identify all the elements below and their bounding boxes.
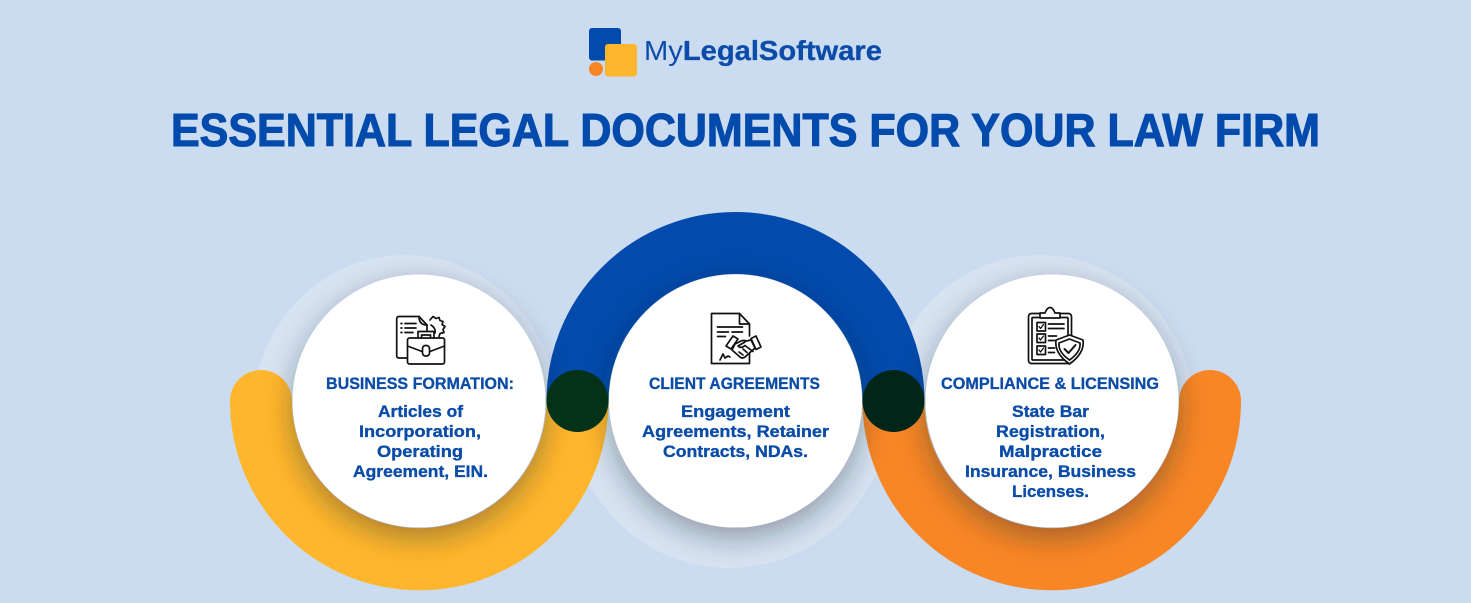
body text: Articles of <box>378 402 463 421</box>
icon: document and briefcase <box>397 316 445 364</box>
arc: orange <box>894 401 1210 559</box>
body text <box>353 402 488 481</box>
logo mark <box>589 28 637 76</box>
heading: COMPLIANCE & LICENSING <box>941 375 1159 393</box>
connector: left dark circle <box>546 370 608 432</box>
body text <box>642 402 829 461</box>
white circle <box>609 274 862 528</box>
arc: yellow <box>261 401 578 559</box>
panel: business formation <box>292 274 546 528</box>
icon: clipboard and shield <box>1028 308 1083 364</box>
halo: center <box>570 248 890 568</box>
body text: Insurance, Business <box>965 462 1136 481</box>
body text: Registration, <box>996 422 1105 441</box>
title: ESSENTIAL LEGAL DOCUMENTS FOR YOUR LAW FIRM <box>171 104 1320 156</box>
body text: Engagement <box>681 402 790 421</box>
body text: Licenses. <box>1012 482 1089 501</box>
halo: left <box>253 255 557 569</box>
body text: Agreement, EIN. <box>353 462 488 481</box>
logo wordmark: MyLegalSoftware <box>644 35 882 66</box>
body text <box>965 402 1136 501</box>
logo <box>589 28 882 76</box>
white circle <box>292 274 546 528</box>
halo: right <box>886 255 1194 569</box>
arc: blue <box>578 243 894 401</box>
icon: signed contract and handshake <box>712 314 761 364</box>
panel: client agreements <box>609 274 862 528</box>
connector: right dark circle <box>862 370 924 432</box>
heading: BUSINESS FORMATION: <box>326 375 514 393</box>
body text: Agreements, Retainer <box>642 422 829 441</box>
body text: Malpractice <box>999 442 1102 461</box>
body text: Incorporation, <box>359 422 481 441</box>
body text: Operating <box>377 442 463 461</box>
body text: State Bar <box>1012 402 1089 421</box>
body text: Contracts, NDAs. <box>663 442 808 461</box>
white circle <box>926 274 1178 528</box>
panel: compliance and licensing <box>926 274 1178 528</box>
heading: CLIENT AGREEMENTS <box>649 375 820 393</box>
